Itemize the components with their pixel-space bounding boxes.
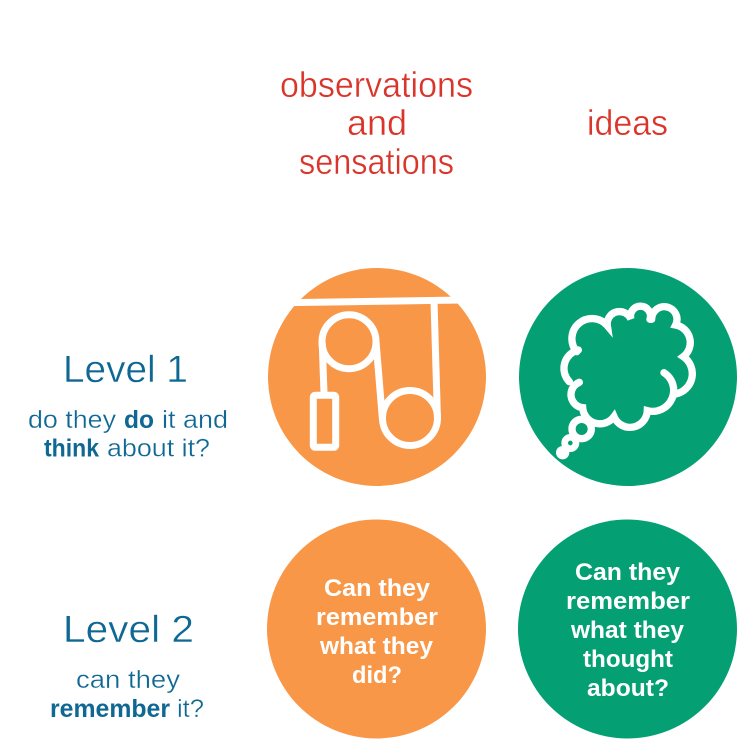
text: level 2 ideas question: Can they bbox=[575, 559, 680, 586]
row label: level 1: do bbox=[124, 406, 154, 434]
panel: level 1 observations circle bbox=[268, 268, 486, 486]
text: level 2 observations question: remember bbox=[316, 604, 438, 631]
text: level 2 ideas question: about? bbox=[587, 675, 669, 702]
text: level 2 ideas question: thought bbox=[583, 646, 673, 673]
row label: level 2 bbox=[50, 609, 204, 723]
row label: level 1: it and bbox=[162, 406, 228, 434]
row label: level 1: think bbox=[44, 434, 99, 462]
row label: level 2: Level 2 bbox=[63, 609, 194, 651]
text: level 2 observations question bbox=[316, 575, 438, 689]
icon: thought bubble bbox=[556, 306, 692, 459]
row label: level 1: Level 1 bbox=[63, 349, 188, 391]
panel: level 1 ideas circle bbox=[519, 268, 737, 486]
text: level 2 observations question: what they bbox=[319, 633, 433, 660]
heading: observations and sensations bbox=[280, 64, 473, 182]
heading: ideas: ideas bbox=[587, 102, 668, 143]
text: level 2 observations question: Can they bbox=[324, 575, 430, 602]
text: level 2 ideas question: remember bbox=[566, 588, 690, 615]
panel: level 2 observations circle bbox=[267, 520, 486, 738]
panel: level 2 ideas circle bbox=[518, 520, 737, 738]
heading: observations and sensations: and bbox=[347, 102, 407, 143]
row label: level 2: can they bbox=[76, 666, 181, 694]
icon: pulley bbox=[290, 300, 462, 447]
row label: level 2: it? bbox=[177, 695, 204, 723]
row label: level 1: do they bbox=[28, 406, 117, 434]
text: level 2 ideas question bbox=[566, 559, 690, 702]
heading: observations and sensations: observations bbox=[280, 64, 473, 105]
row label: level 1 bbox=[28, 349, 228, 462]
heading: observations and sensations: sensations bbox=[299, 141, 454, 182]
text: level 2 ideas question: what they bbox=[570, 617, 684, 644]
row label: level 1: about it? bbox=[107, 434, 210, 462]
row label: level 2: remember bbox=[50, 695, 170, 723]
text: level 2 observations question: did? bbox=[352, 662, 402, 689]
